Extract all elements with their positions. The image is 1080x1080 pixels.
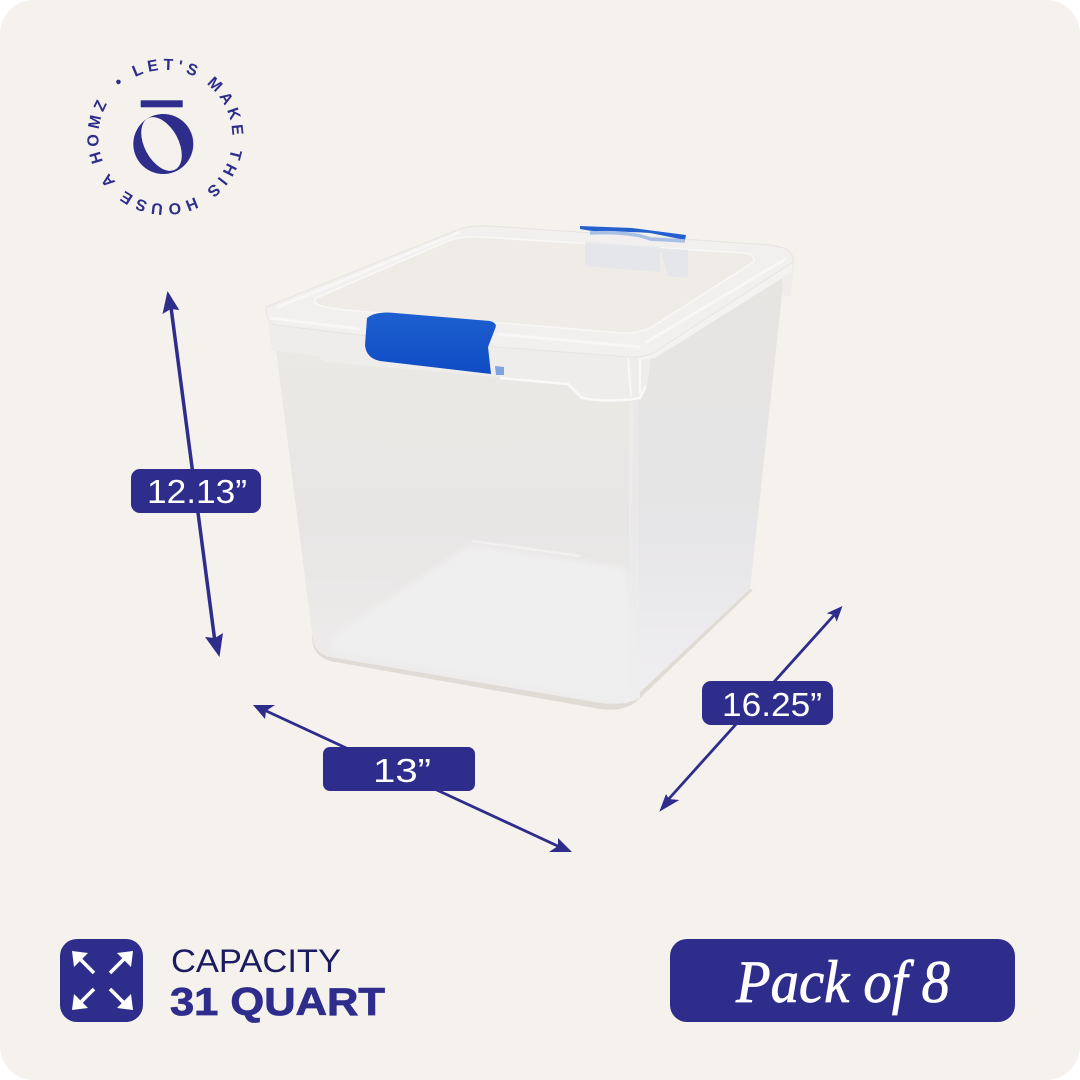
icon: capacity arrows (60, 939, 143, 1022)
lid front skirt (268, 322, 652, 400)
front blue latch (365, 313, 496, 374)
rear lid tabs (781, 258, 794, 296)
storage box (266, 226, 794, 710)
capacity value: 31 QUART (170, 981, 385, 1024)
depth label (702, 681, 833, 725)
lid edge highlights (270, 232, 787, 347)
rear latch (580, 226, 686, 240)
height dimension (131, 291, 261, 657)
logo letter o (133, 110, 193, 178)
skirt rib (628, 358, 640, 396)
depth dimension: 16.25” (722, 686, 822, 723)
pack badge (670, 939, 1015, 1022)
width dimension (253, 705, 572, 852)
capacity label: CAPACITY (171, 943, 341, 979)
rear latch clear housing (585, 242, 688, 278)
width dimension: 13” (373, 752, 431, 789)
height label (131, 469, 261, 513)
box floor (328, 545, 640, 698)
width label (323, 747, 475, 791)
logo badge (87, 58, 244, 215)
box base rim (312, 585, 753, 710)
rear latch fold (590, 233, 685, 241)
box side wall (625, 276, 784, 704)
skirt lower outline (500, 378, 646, 400)
box front wall (276, 350, 645, 704)
height arrow (162, 291, 223, 657)
depth arrow (659, 606, 842, 812)
inner vertical corner (630, 400, 638, 695)
latch end (495, 366, 504, 375)
floor back edge highlight (472, 541, 580, 556)
circular slogan: • LET'S MAKE THIS HOUSE A HOMZ (87, 58, 244, 215)
capacity text (170, 943, 385, 1024)
logo bar (141, 100, 183, 107)
lid side band (640, 258, 792, 360)
depth dimension (659, 606, 842, 812)
lid recessed panel (315, 237, 754, 333)
lid top (266, 226, 793, 357)
width arrow (253, 705, 572, 852)
pack badge: Pack of 8 (735, 949, 950, 1015)
height dimension: 12.13” (147, 473, 247, 510)
